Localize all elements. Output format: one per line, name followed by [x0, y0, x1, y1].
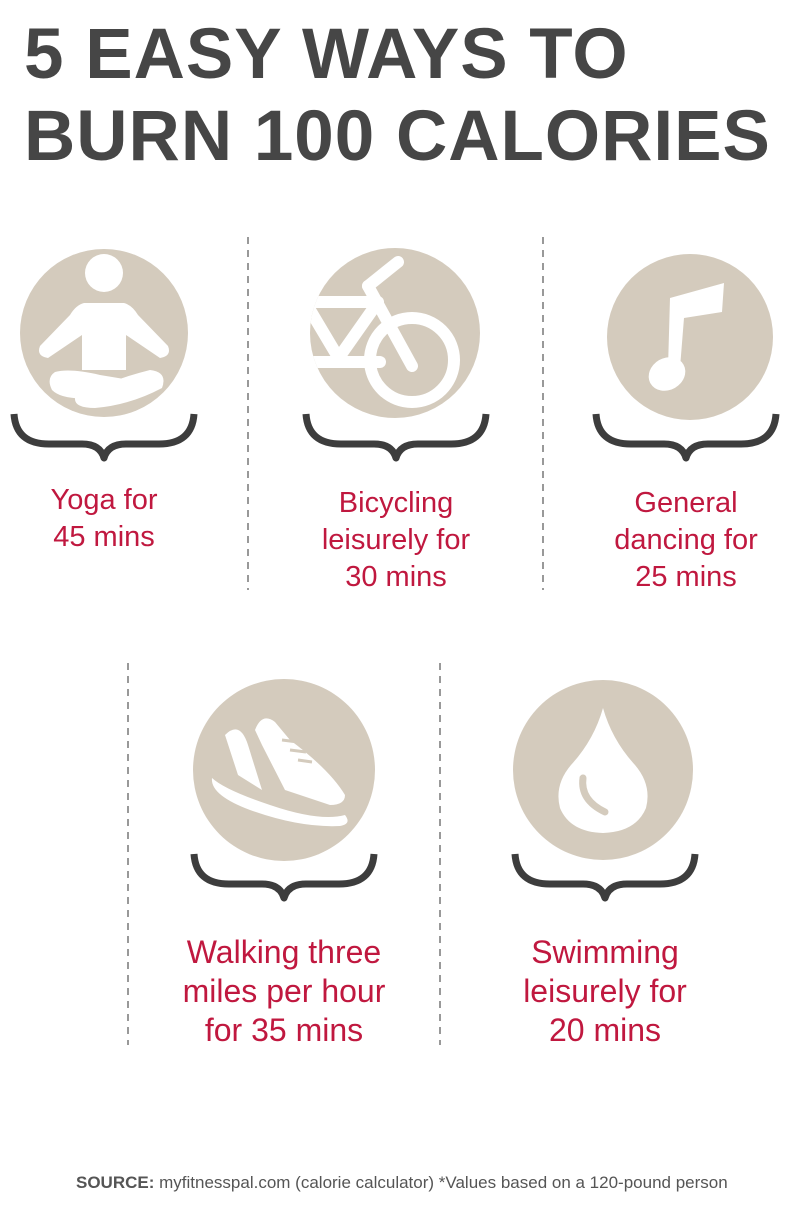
label: walking: Walking three: [187, 934, 381, 970]
label: dancing: General: [634, 487, 738, 519]
label: dancing: 25 mins: [635, 561, 737, 593]
label: bicycling: [322, 487, 470, 593]
source: SOURCE: myfitnesspal.com (calorie calculator) *Values based on a 120-pound person: [76, 1173, 728, 1192]
icon: yoga: [20, 249, 188, 417]
label: bicycling: Bicycling: [339, 487, 453, 519]
icon: music note: [607, 254, 773, 420]
title: 5 EASY WAYS TO: [24, 15, 629, 94]
label: yoga: 45 mins: [53, 521, 155, 553]
label: swimming: 20 mins: [549, 1012, 661, 1048]
label: yoga: Yoga for: [51, 484, 157, 516]
label: walking: for 35 mins: [205, 1012, 363, 1048]
label: dancing: dancing for: [614, 524, 758, 556]
label: swimming: [523, 934, 687, 1048]
label: dancing: [614, 487, 758, 593]
icon: water drop: [513, 680, 693, 860]
label: swimming: leisurely for: [523, 973, 687, 1009]
label: swimming: Swimming: [531, 934, 679, 970]
label: bicycling: 30 mins: [345, 561, 447, 593]
title: [24, 15, 771, 176]
braces: [14, 414, 776, 898]
title: BURN 100 CALORIES: [24, 97, 771, 176]
label: walking: [183, 934, 385, 1048]
label: bicycling: leisurely for: [322, 524, 470, 556]
icon: shoe: [193, 679, 375, 861]
label: yoga: [51, 484, 158, 553]
graphics: [10, 237, 780, 1045]
icon: bicycle: [300, 248, 480, 418]
label: walking: miles per hour: [183, 973, 385, 1009]
